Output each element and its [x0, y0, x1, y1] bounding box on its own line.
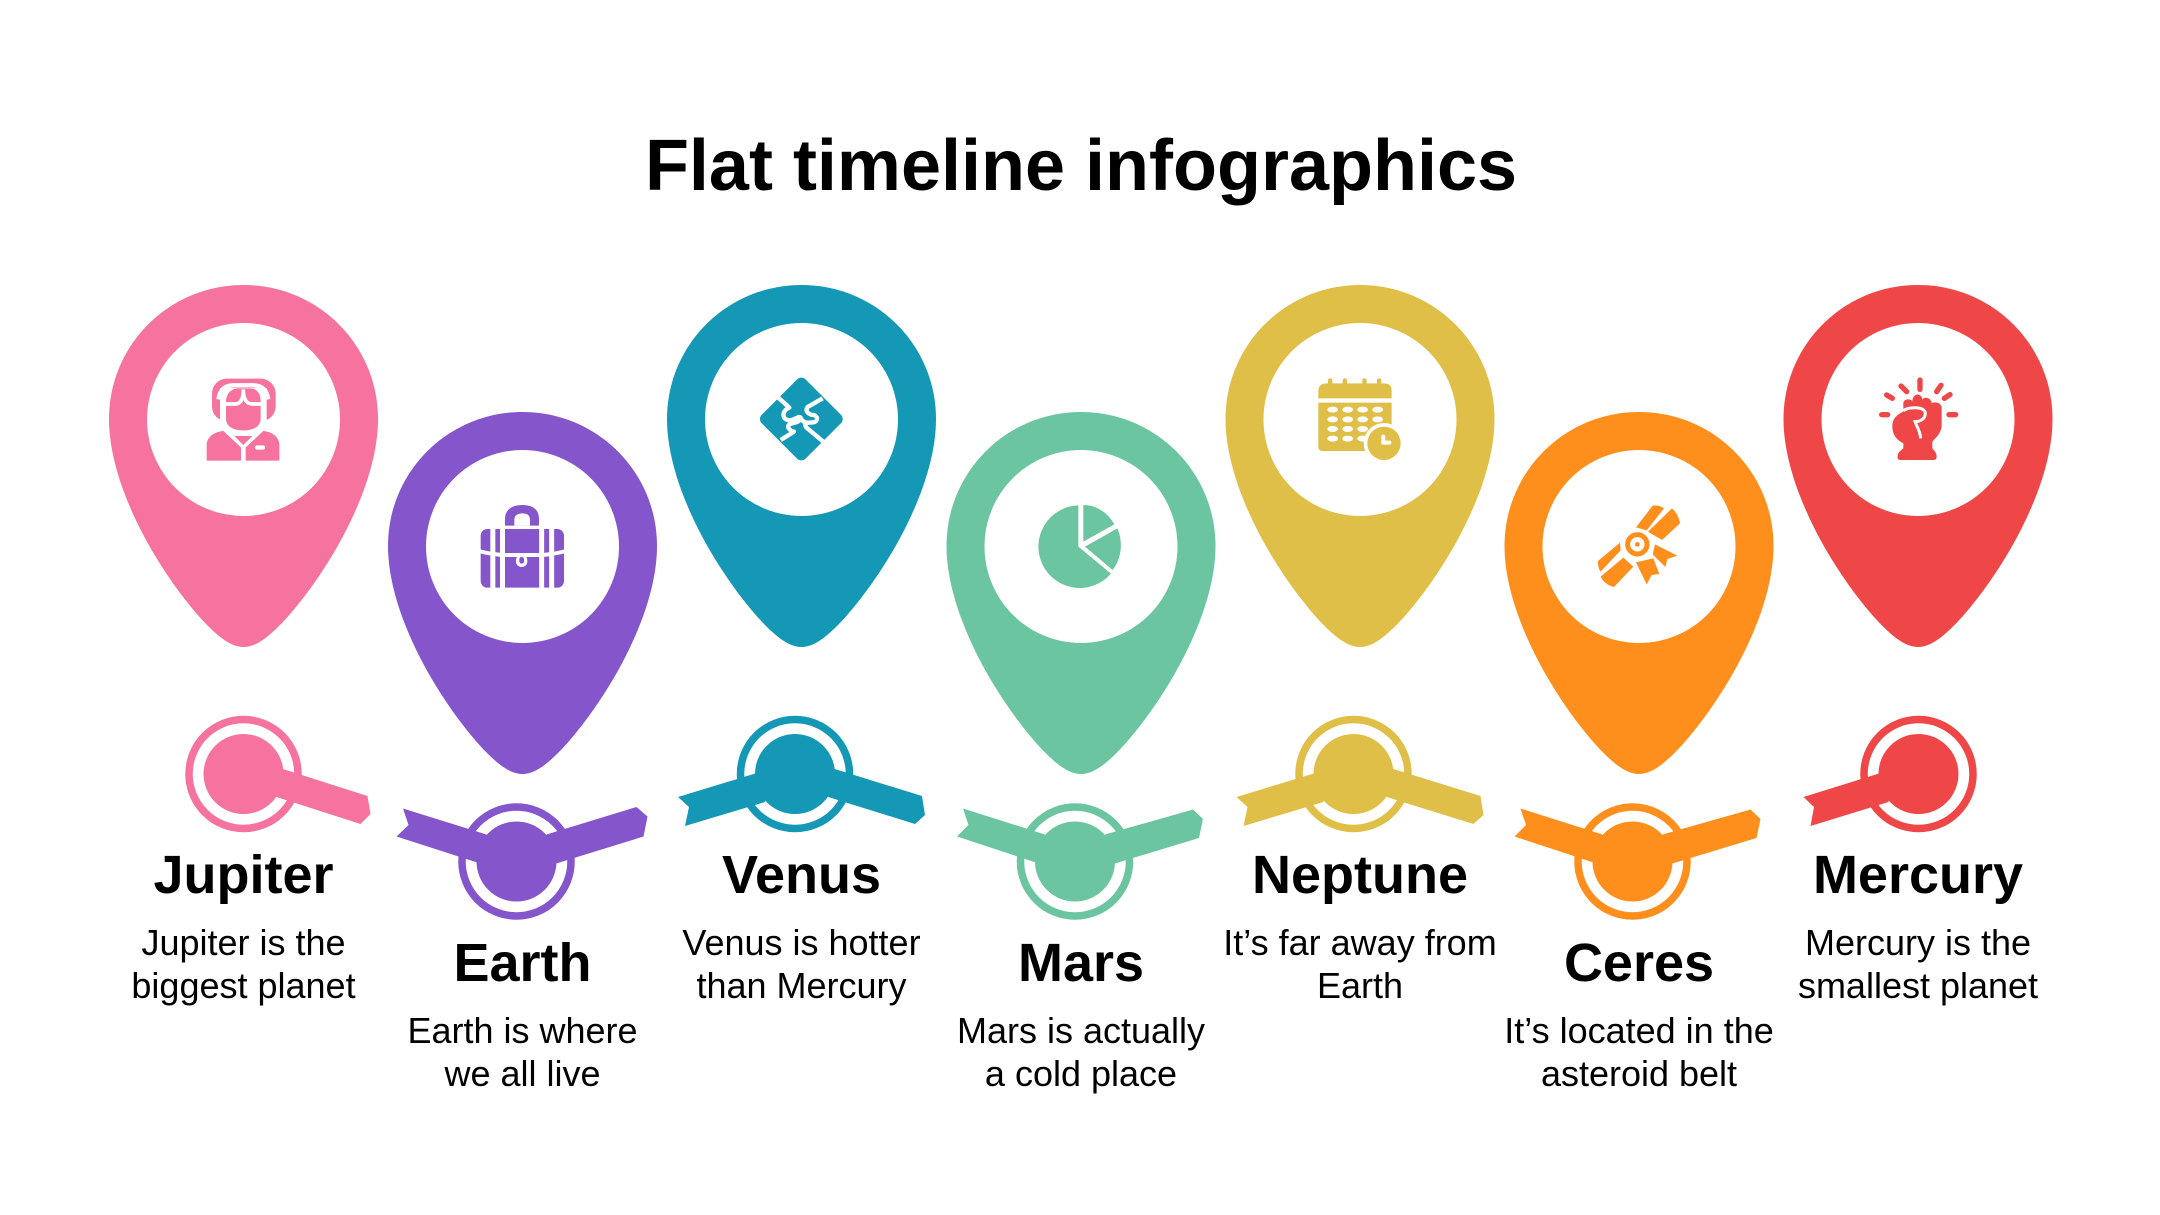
icon: puzzle [757, 375, 845, 463]
location pin: Ceres [1504, 412, 1774, 774]
panel: Mars [946, 412, 1216, 1094]
panel: Jupiter [109, 285, 378, 1006]
heading: Neptune: Neptune [1252, 845, 1468, 905]
description: Ceres: asteroid belt [1541, 1053, 1737, 1094]
description: Mercury [1798, 922, 2038, 1006]
heading: Mars: Mars [1018, 933, 1144, 993]
description: Ceres: It’s located in the [1504, 1010, 1774, 1051]
panel: Mercury [1784, 285, 2052, 1006]
description: Mercury: Mercury is the [1805, 922, 2031, 963]
icon: person with headset [207, 379, 279, 461]
location pin: Venus [667, 285, 936, 647]
icon: calendar with clock [1318, 378, 1404, 464]
description: Earth: we all live [443, 1053, 601, 1094]
description: Mars: a cold place [985, 1053, 1177, 1094]
icon: briefcase [479, 505, 566, 589]
description: Venus: than Mercury [696, 965, 907, 1006]
description: Mercury: smallest planet [1798, 965, 2038, 1006]
marker: Neptune ring and ribbons [1236, 720, 1484, 828]
location pin: Earth [388, 412, 657, 774]
title: Flat timeline infographics [645, 126, 1517, 206]
marker: Mercury ring and ribbon [1804, 720, 1973, 828]
description: Neptune [1223, 922, 1497, 1006]
description: Neptune: It’s far away from [1223, 922, 1497, 963]
location pin: Neptune [1226, 285, 1494, 647]
icon: diploma scroll [1598, 505, 1680, 587]
description: Jupiter [131, 922, 356, 1006]
panel: Venus [667, 285, 936, 1006]
heading: Venus: Venus [722, 845, 881, 905]
marker: Ceres ring and ribbons [1514, 807, 1760, 916]
marker: Jupiter ring and ribbon [189, 720, 370, 828]
heading: Mercury: Mercury [1813, 845, 2023, 905]
description: Earth: Earth is where [407, 1010, 638, 1051]
description: Venus: Venus is hotter [682, 922, 921, 963]
description: Mars [957, 1010, 1205, 1094]
marker: Earth ring and ribbons [396, 807, 648, 916]
location pin: Mars [946, 412, 1216, 774]
heading: Ceres: Ceres [1564, 933, 1714, 993]
description: Ceres [1504, 1010, 1774, 1094]
description: Jupiter: biggest planet [131, 965, 356, 1006]
heading: Jupiter: Jupiter [153, 845, 334, 905]
panel: Ceres [1504, 412, 1774, 1094]
location pin: Mercury [1784, 285, 2052, 647]
description: Neptune: Earth [1317, 965, 1403, 1006]
location pin: Jupiter [109, 285, 378, 647]
description: Earth [407, 1010, 638, 1094]
icon: pie chart [1038, 505, 1121, 588]
description: Jupiter: Jupiter is the [141, 922, 346, 963]
description: Venus [682, 922, 921, 1006]
panel: Earth [388, 412, 657, 1094]
heading: Earth: Earth [453, 933, 592, 993]
icon: raised fist [1882, 380, 1956, 460]
marker: Mars ring and ribbons [957, 807, 1203, 916]
marker: Venus ring and ribbons [678, 720, 925, 828]
description: Mars: Mars is actually [957, 1010, 1205, 1051]
panel: Neptune [1223, 285, 1497, 1006]
